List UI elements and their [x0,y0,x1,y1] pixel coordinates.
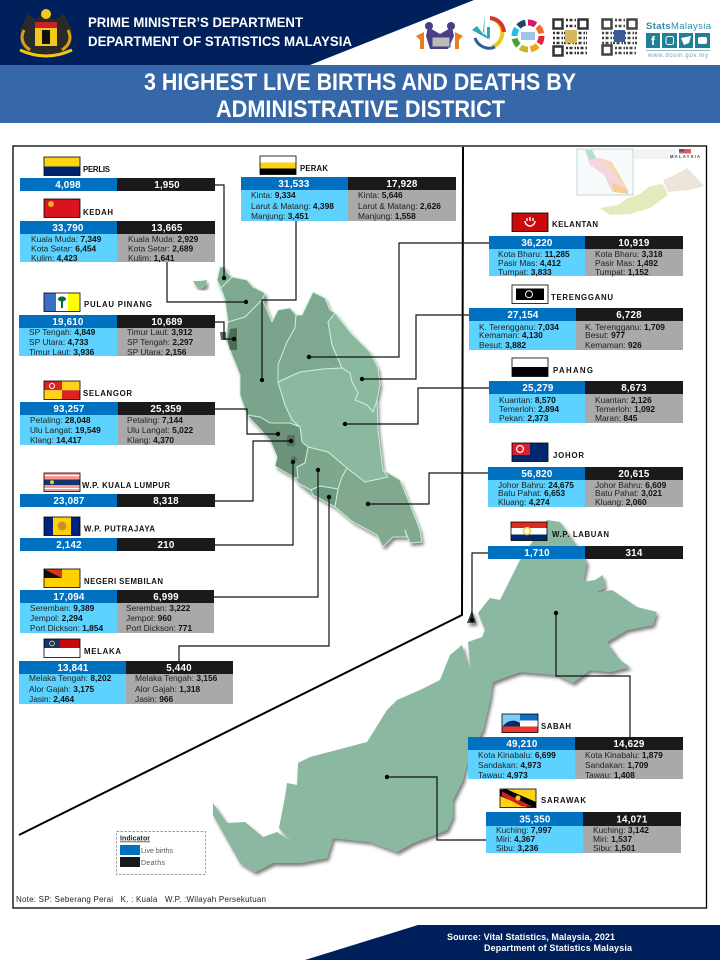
districts: deaths: Temerloh: 1,092 [595,404,655,414]
flag: Kelantan [512,213,548,232]
note: Note: SP: Seberang Perai K. : Kuala W.P. :Wilayah Persekutuan [16,895,266,904]
StatsMalaysia social block: f [651,34,656,48]
districts: deaths: Ulu Langat: 5,022 [127,425,193,435]
bars [20,538,215,551]
state name: Terengganu: TERENGGANU [551,293,613,302]
totals: 1,710 [524,548,550,559]
bars [486,812,681,853]
bars [20,590,214,633]
state name: Sabah: SABAH [541,722,571,731]
districts: live births: K. Terengganu: 7,034 [479,322,559,332]
districts: deaths [593,825,649,853]
districts: live births: Manjung: 3,451 [251,211,309,221]
totals [506,739,645,750]
flag: Pulau Pinang [44,293,80,312]
totals [519,814,648,826]
totals [524,548,643,559]
totals [278,179,418,190]
region: Kuala Lumpur [287,435,295,446]
districts: deaths [128,234,199,263]
panel: Sarawak [486,789,681,853]
totals: 13,841 [57,663,89,674]
districts: live births: Batu Pahat: 6,653 [498,488,565,498]
districts: live births [251,190,334,221]
districts: live births: Timur Laut: 3,936 [29,347,95,357]
totals: 56,820 [521,469,553,480]
districts: live births: Seremban: 9,389 [30,603,95,613]
districts: deaths: Tawau: 1,408 [585,770,635,780]
districts: deaths [127,327,194,357]
region: Selangor [247,415,308,478]
connector: Selangor [215,409,280,436]
districts: deaths: Larut & Matang: 2,626 [358,201,441,211]
region: Melaka [311,486,338,507]
icon: national crest [20,9,72,58]
map: Borneo [213,520,657,872]
totals: 210 [158,540,175,551]
panel: Melaka [19,639,233,704]
districts: live births: Temerloh: 2,894 [499,404,559,414]
districts: deaths: Timur Laut: 3,912 [127,327,193,337]
region: Sarawak [213,637,493,872]
StatsMalaysia social block [646,21,712,59]
districts: deaths: Seremban: 3,222 [126,603,191,613]
districts: deaths: Sibu: 1,501 [593,843,636,853]
districts: live births: Sandakan: 4,973 [478,760,542,770]
flag: Johor [512,443,548,462]
districts: deaths: Sandakan: 1,709 [585,760,649,770]
districts: live births: Kuala Muda: 7,349 [31,234,102,244]
districts: deaths: Kuching: 3,142 [593,825,649,835]
districts: deaths: SP Tengah: 2,297 [127,337,194,347]
districts: deaths [595,480,667,507]
districts: live births [498,249,570,277]
districts: deaths: Petaling: 7,144 [127,415,183,425]
bars [489,236,683,276]
totals [521,469,650,480]
main frame [13,146,706,908]
districts: deaths: Kuantan: 2,126 [595,395,652,405]
state name: Pahang: PAHANG [553,366,593,375]
districts: deaths: Kemaman: 926 [585,340,642,350]
districts: live births [30,603,103,633]
legend [116,832,206,874]
connector: Johor [366,473,488,506]
totals: 49,210 [506,739,538,750]
districts: deaths: SP Utara: 2,156 [127,347,187,357]
totals [56,540,175,551]
districts: live births [29,673,112,704]
flag: Putrajaya [44,517,80,536]
icon: QR code portal [553,20,588,56]
panel: Pahang [489,358,683,423]
region: Pulau Pinang [228,328,237,350]
totals [52,223,183,234]
footer source: Source: Vital Statistics, Malaysia, 2021 [447,932,615,942]
header banner [0,0,712,65]
districts: deaths: Kuala Muda: 2,929 [128,234,199,244]
flag: Perak [260,156,296,174]
totals: 6,999 [153,592,179,603]
bars [20,402,215,445]
legend: Indicator [120,836,150,842]
region: Johor [335,468,422,547]
region: Kelantan [278,292,342,382]
totals: 23,087 [53,496,85,507]
region: Negeri Sembilan [295,447,347,490]
districts: deaths: Jasin: 966 [135,694,174,704]
state name: Negeri Sembilan: NEGERI SEMBILAN [84,577,163,586]
districts: live births [30,415,101,445]
totals [53,404,182,415]
districts: live births: Larut & Matang: 4,398 [251,201,334,211]
panel: W.P. Labuan [488,522,683,559]
title band: 3 HIGHEST LIVE BIRTHS AND DEATHS BY [144,69,576,96]
live births bar [20,178,117,191]
region: Pahang [278,368,388,482]
districts: live births: Kinta: 9,334 [251,190,296,200]
bars [488,467,683,507]
panel: Sabah [468,714,683,780]
flag: Sabah [502,714,538,732]
districts: deaths: Kinta: 5,646 [358,190,403,200]
totals: 19,610 [52,317,84,328]
districts: deaths [358,190,441,221]
totals: 14,629 [613,739,645,750]
totals: 93,257 [53,404,85,415]
panel: Pulau Pinang [19,293,215,357]
districts: deaths [126,603,192,633]
connector: Perak [260,221,296,382]
panel: Kelantan [489,213,683,277]
totals: 25,359 [150,404,182,415]
totals: 17,094 [53,592,85,603]
districts: live births [479,322,559,350]
districts: live births: Kulim: 4,423 [31,253,78,263]
districts: live births: SP Tengah: 4,849 [29,327,96,337]
bars [19,315,215,356]
districts: deaths: Besut: 977 [585,330,625,340]
totals: 10,689 [151,317,183,328]
districts: deaths: Port Dickson: 771 [126,623,192,633]
totals [52,317,183,328]
inset location map: MALAYSIA [670,154,700,159]
totals: 8,318 [153,496,179,507]
districts: live births: Alor Gajah: 3,175 [29,684,95,694]
legend: Deaths [141,860,166,867]
icon: QR code facebook [602,20,637,54]
districts: deaths: Maran: 845 [595,413,638,423]
districts: deaths: Manjung: 1,558 [358,211,416,221]
districts: deaths: Kota Bharu: 3,318 [595,249,663,259]
districts: live births: Ulu Langat: 19,549 [30,425,101,435]
totals: 17,928 [386,179,418,190]
bars [20,221,215,262]
flag: Terengganu [512,285,548,304]
bars [489,381,683,423]
flag: Perlis [44,157,80,176]
state name: Perlis: PERLIS [83,165,110,174]
districts: live births: Klang: 14,417 [30,435,82,445]
districts: live births [29,327,96,357]
totals [55,180,180,191]
districts: live births: Pasir Mas: 4,412 [498,258,561,268]
totals [53,592,179,603]
districts: deaths [585,750,663,780]
panel: Negeri Sembilan [20,569,214,633]
districts: live births: Pekan: 2,373 [499,413,549,423]
inset location map [577,149,704,215]
region: Langkawi [193,280,207,289]
icon: vision logo [472,14,504,48]
state name: Pulau Pinang: PULAU PINANG [84,300,152,309]
districts: deaths: Kluang: 2,060 [595,497,647,507]
region: Sabah [478,520,657,683]
totals: 14,071 [616,814,648,826]
totals [53,496,179,507]
totals: 27,154 [507,310,539,321]
districts: live births: Jempol: 2,294 [30,613,83,623]
peninsula base silhouette [217,267,422,547]
connector: Perlis [215,185,226,280]
districts: deaths: K. Terengganu: 1,709 [585,322,665,332]
totals: 31,533 [278,179,310,190]
districts: deaths: Johor Bahru: 6,609 [595,480,667,490]
districts: deaths: Klang: 4,370 [127,435,174,445]
totals: 36,220 [521,238,553,249]
districts: deaths [135,673,218,704]
districts: live births: Kota Bharu: 11,285 [498,249,570,259]
districts: deaths: Batu Pahat: 3,021 [595,488,662,498]
state name: Selangor: SELANGOR [83,389,132,398]
districts: deaths: Kulim: 1,641 [128,253,175,263]
panel: Selangor [20,381,215,445]
region: Perak [226,300,300,427]
districts: live births: Kota Kinabalu: 6,699 [478,750,556,760]
panel: Johor [488,443,683,507]
panel: Terengganu [469,285,683,350]
connector: Pahang [343,388,489,426]
totals: 2,142 [56,540,82,551]
connector: Pulau Pinang [215,322,236,341]
bars [20,494,215,507]
flag: Kedah [44,199,80,218]
connector: Sabah [554,611,630,737]
StatsMalaysia social block: www.dosm.gov.my [647,53,708,59]
districts: live births: Sibu: 3,236 [496,843,539,853]
districts: deaths [585,322,665,350]
state name: Kuala Lumpur: W.P. KUALA LUMPUR [82,481,170,490]
districts: live births [31,234,102,263]
totals [521,238,650,249]
totals: 8,673 [621,383,647,394]
totals [507,310,642,321]
districts: live births: Jasin: 2,464 [29,694,75,704]
peninsula and borneo divider [19,147,463,835]
panel: Perak [241,156,456,221]
totals [57,663,192,674]
totals: 10,919 [618,238,650,249]
districts: live births: Tumpat: 3,833 [498,267,552,277]
districts: live births: SP Utara: 4,733 [29,337,89,347]
totals [522,383,647,394]
flag: Sarawak [500,789,536,808]
districts: live births: Tawau: 4,973 [478,770,528,780]
state name: Melaka: MELAKA [84,647,121,656]
flag: Kuala Lumpur [44,473,80,492]
connector: Putrajaya [215,460,295,545]
legend: Live births [141,848,174,855]
connector: Kedah [167,262,248,304]
totals: 33,790 [52,223,84,234]
connector: Negeri Sembilan [214,468,320,597]
totals: 5,440 [166,663,192,674]
panel: Kedah [20,199,215,263]
districts: live births: Besut: 3,882 [479,340,526,350]
state name: Perak: PERAK [300,164,328,173]
bars [19,661,233,704]
districts: live births: Petaling: 28,048 [30,415,91,425]
flag: Pahang [512,358,548,376]
connector: Sarawak [385,775,487,840]
region: Perlis [217,267,232,288]
totals: 314 [626,548,643,559]
districts: live births: Miri: 4,367 [496,834,535,844]
totals: 35,350 [519,814,551,826]
bars [241,177,456,221]
peninsula region fills [217,267,422,547]
districts: live births: Melaka Tengah: 8,202 [29,673,112,683]
panel: Perlis [20,157,215,191]
panel: W.P. Putrajaya [20,517,215,551]
title band [0,65,720,123]
state name: Kedah: KEDAH [83,208,113,217]
districts: live births [498,480,574,507]
state name: Johor: JOHOR [553,451,584,460]
state name: Kelantan: KELANTAN [552,220,598,229]
connector: Terengganu [360,315,469,381]
region: Kedah [221,277,265,322]
region: Penang island [220,332,226,340]
districts: deaths: Alor Gajah: 1,318 [135,684,201,694]
districts: deaths: Miri: 1,537 [593,834,632,844]
districts: live births: Kuching: 7,997 [496,825,552,835]
state name: Sarawak: SARAWAK [541,796,586,805]
districts: deaths: Tumpat: 1,152 [595,267,649,277]
region: Labuan [467,610,476,623]
districts: live births [496,825,552,853]
districts: live births: Kuantan: 8,570 [499,395,556,405]
districts: live births: Kota Setar: 6,454 [31,244,97,254]
department names [88,14,352,49]
totals: 4,098 [55,180,81,191]
flag: Melaka [44,639,80,658]
bars [469,308,683,350]
flag: Negeri Sembilan [44,569,80,588]
department names: PRIME MINISTER’S DEPARTMENT [88,14,303,30]
districts: live births [478,750,556,780]
region: Putrajaya [291,456,297,462]
districts: deaths: Melaka Tengah: 3,156 [135,673,218,683]
map: Peninsular Malaysia [193,267,422,547]
districts: deaths [127,415,193,445]
state name: Putrajaya: W.P. PUTRAJAYA [84,524,155,534]
bars [468,737,683,779]
footer source: Department of Statistics Malaysia [484,943,633,953]
connector: Labuan [470,553,488,622]
icon: SDG wheel [509,17,547,55]
districts: live births: Kemaman: 4,130 [479,330,543,340]
panel: W.P. Kuala Lumpur [20,473,215,507]
connector: Kuala Lumpur [215,439,293,501]
connector: Melaka [179,495,331,661]
totals: 25,279 [522,383,554,394]
title band: ADMINISTRATIVE DISTRICT [216,96,505,123]
icon: census logo [416,22,463,49]
deaths bar [117,178,215,191]
districts: live births: Port Dickson: 1,854 [30,623,103,633]
districts: deaths: Jempol: 960 [126,613,172,623]
flag: Selangor [44,381,80,400]
department names: DEPARTMENT OF STATISTICS MALAYSIA [88,33,352,49]
districts: live births: Kluang: 4,274 [498,497,550,507]
districts: deaths [595,395,655,423]
totals: 20,615 [618,469,650,480]
districts: deaths [595,249,663,277]
connector: Kelantan [307,243,489,359]
StatsMalaysia social block: StatsMalaysia [646,21,712,32]
bars [488,546,683,559]
footer source [305,925,720,960]
totals: 1,950 [154,180,180,191]
districts: deaths: Kota Setar: 2,689 [128,244,194,254]
state name: Labuan: W.P. LABUAN [552,530,609,539]
districts: deaths: Kota Kinabalu: 1,879 [585,750,663,760]
flag: Labuan [511,522,547,540]
region: Terengganu [328,313,380,412]
totals: 6,728 [616,310,642,321]
totals: 13,665 [151,223,183,234]
districts: deaths: Pasir Mas: 1,492 [595,258,658,268]
districts: live births: Johor Bahru: 24,675 [498,480,574,490]
districts: live births [499,395,559,423]
